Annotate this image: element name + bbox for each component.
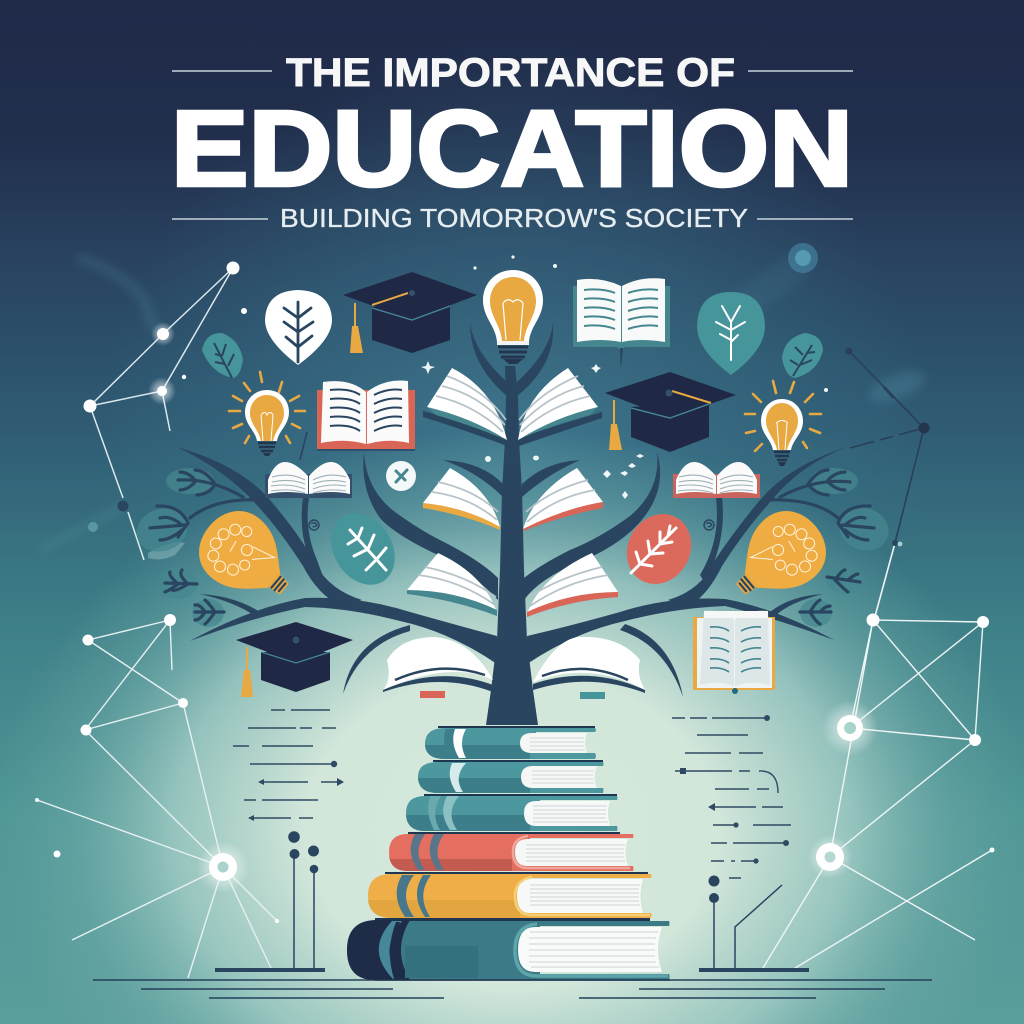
open book: root right <box>533 637 645 699</box>
ground lines <box>93 980 932 998</box>
glow blob: top right <box>788 243 818 273</box>
title rules bottom <box>172 218 853 220</box>
icon: light bulb left <box>229 372 305 456</box>
icon: red oval leaf <box>615 503 703 595</box>
title <box>171 51 853 233</box>
dashed labels right <box>672 715 791 878</box>
fan book: top right <box>518 368 598 440</box>
branch: large right <box>524 452 660 600</box>
icon: small teal leaf left <box>202 333 243 378</box>
branch: middle right <box>522 460 580 497</box>
icon: graduation cap right <box>605 372 736 452</box>
branch: upper right <box>519 412 602 446</box>
leaf twigs right <box>766 470 874 624</box>
stem: small right book <box>700 498 723 583</box>
rays <box>229 372 305 443</box>
subtitle: BUILDING TOMORROW'S SOCIETY <box>280 203 748 233</box>
fan book: middle right <box>523 468 603 531</box>
fan book: lower left <box>407 553 497 616</box>
rays <box>745 381 821 451</box>
icon: small open book right <box>673 462 760 498</box>
branch: upper left <box>423 411 507 446</box>
book stack <box>347 726 670 980</box>
icon: orange bulb left <box>185 497 309 618</box>
branch leaves: teal blobs <box>130 468 895 627</box>
icon: small open book left <box>265 432 352 498</box>
fan book: top left <box>427 368 507 440</box>
stem: small left book <box>302 498 325 582</box>
icon: teal leaf top right <box>697 292 765 375</box>
network: bottom right <box>763 614 994 968</box>
branch: top right fork <box>517 323 553 396</box>
icon: light bulb top <box>483 270 543 364</box>
icon: small teal leaf right <box>782 333 823 378</box>
network: bottom left <box>35 614 279 978</box>
icon: teal oval leaf <box>318 501 408 597</box>
ground and stems right <box>699 876 809 970</box>
tree <box>177 323 847 725</box>
title rules top <box>172 70 853 72</box>
icon: open book top right <box>573 278 670 370</box>
branch: large left <box>363 452 498 600</box>
heading: education: EDUCATION <box>171 88 853 208</box>
icon: white leaf <box>265 290 332 365</box>
book 5 <box>368 872 652 918</box>
branch: low right <box>527 599 834 664</box>
icon: x circle <box>386 461 416 491</box>
icon: open book lower right <box>693 611 775 694</box>
branch: long left <box>177 447 362 607</box>
trunk <box>486 366 538 725</box>
book 4 <box>389 832 634 871</box>
tab: red <box>420 691 445 698</box>
icon: graduation cap lower left <box>236 622 353 697</box>
sparkles and dots <box>421 255 828 499</box>
branch: top left fork <box>470 323 507 396</box>
book 6 <box>347 918 670 980</box>
branch: middle left <box>443 460 503 497</box>
icon: light bulb right <box>745 381 821 466</box>
branch: long right <box>668 447 847 607</box>
icon: graduation cap top <box>343 272 477 353</box>
icon: orange bulb right <box>716 497 840 618</box>
book 1 <box>425 726 596 759</box>
ground and stems left <box>215 831 325 970</box>
fan book: lower right <box>527 553 618 617</box>
leaf twigs left <box>150 470 258 624</box>
network: top left <box>84 262 247 560</box>
branch: low left <box>190 598 497 664</box>
fan book: middle left <box>423 468 500 530</box>
tab: teal <box>580 692 605 699</box>
heading: the importance of: THE IMPORTANCE OF <box>286 51 735 95</box>
network: top right <box>846 348 930 620</box>
book 3 <box>406 794 618 831</box>
dashed labels left <box>233 710 344 821</box>
branch: lower arcs <box>343 625 410 694</box>
icon: open book left red <box>317 380 415 450</box>
book 2 <box>418 760 604 793</box>
icon: small spirals <box>309 520 714 530</box>
open book: root left <box>383 637 493 698</box>
